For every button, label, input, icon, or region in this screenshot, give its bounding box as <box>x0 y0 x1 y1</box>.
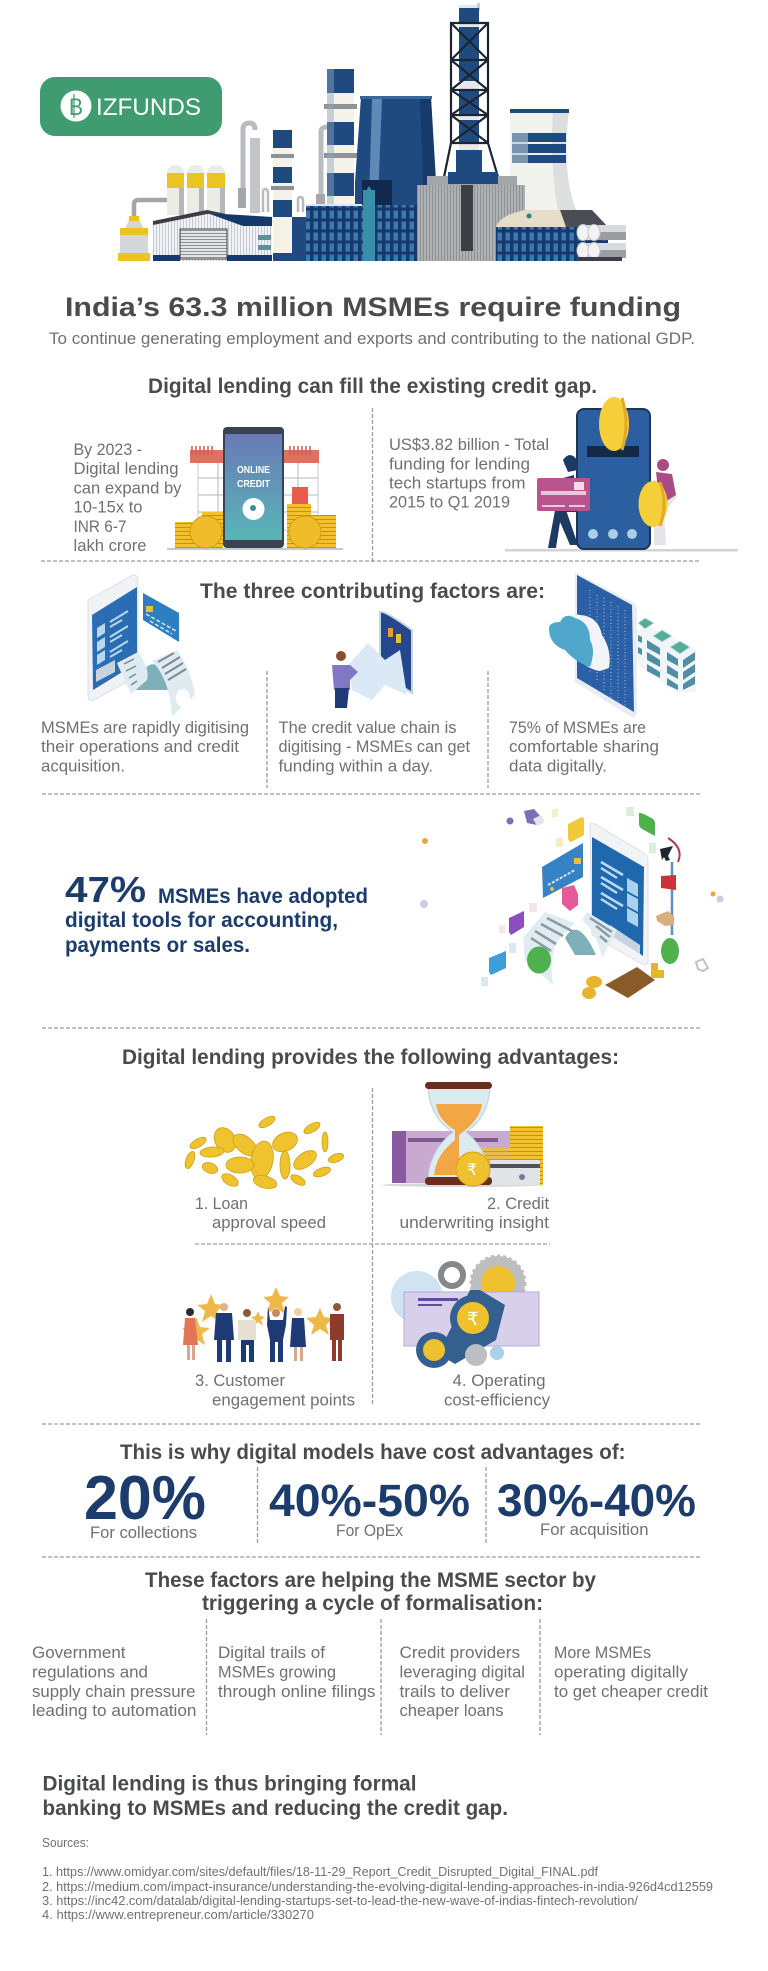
blue office building <box>306 186 417 261</box>
icon: person reading document beside phone <box>332 612 412 708</box>
text: customer engagement: engagement points <box>212 1392 355 1410</box>
icon: scattered gold coins <box>183 1114 345 1191</box>
conclusion: banking to MSMEs and reducing the credit gap. <box>42 1797 508 1820</box>
icon: tablet with cloud and servers <box>549 572 696 718</box>
text: 75 percent <box>509 719 659 776</box>
text: by 2023: lakh crore <box>74 537 146 555</box>
blue cooling tower <box>355 96 436 210</box>
sources: 4. https://www.entrepreneur.com/article/330270 <box>42 1908 314 1922</box>
icon: phone with receipt <box>88 575 195 716</box>
text: credit underwriting insight: 2. Credit <box>487 1195 549 1213</box>
icon: gears with money: ₹ <box>467 1309 478 1330</box>
callout: 47 percent: payments or sales. <box>65 934 250 957</box>
conclusion <box>42 1772 508 1820</box>
subtitle: To continue generating employment and exports and contributing to the national GDP. <box>49 330 695 348</box>
text: credit value chain: The credit value chain is <box>278 719 456 737</box>
title: India’s 63.3 million MSMEs require funding <box>65 292 681 322</box>
text: US$3.82 billion: 2015 to Q1 2019 <box>389 494 510 512</box>
text: credit value chain: funding within a day. <box>278 758 433 776</box>
text: digital trails: through online filings <box>218 1683 376 1701</box>
steel cylinders <box>577 224 626 261</box>
callout: 47 percent: 47% <box>65 869 146 910</box>
text: credit providers: cheaper loans <box>400 1702 504 1720</box>
heading: advantages: Digital lending provides the following advantages: <box>122 1046 619 1069</box>
heading: cycle of formalisation: These factors are helping the MSME sector by <box>145 1569 596 1592</box>
text: 75 percent: comfortable sharing <box>509 738 659 756</box>
icon: online credit phone with calendar and coins <box>167 427 343 550</box>
text: by 2023: 10-15x to <box>74 498 142 516</box>
text: credit underwriting insight <box>400 1195 549 1232</box>
text: credit value chain: digitising - MSMEs can get <box>278 738 470 756</box>
warehouse <box>153 210 306 261</box>
text: loan approval speed <box>195 1195 326 1232</box>
icon: hourglass with money and coins: ₹ <box>467 1160 477 1179</box>
text: credit providers: Credit providers <box>400 1644 520 1662</box>
heading: cost advantages: This is why digital models have cost advantages of: <box>120 1441 626 1464</box>
icon: people with stars <box>182 1287 344 1362</box>
panel: factor 1 digitising operations <box>41 575 249 776</box>
heading: three factors: The three contributing factors are: <box>200 580 545 603</box>
pipes <box>134 123 327 218</box>
logo: Bizfunds <box>40 77 222 136</box>
text: 75 percent: 75% of MSMEs are <box>509 719 646 737</box>
text: by 2023: By 2023 - <box>74 441 142 459</box>
text: US$3.82 billion <box>389 436 549 512</box>
text: digital trails: Digital trails of <box>218 1644 325 1662</box>
text: US$3.82 billion: funding for lending <box>389 456 530 474</box>
icon: hourglass with money and coins <box>382 1082 543 1187</box>
callout: 47 percent: MSMEs have adopted <box>158 885 368 908</box>
text: government regulations: leading to automation <box>32 1702 196 1720</box>
text: government regulations: Government <box>32 1644 126 1662</box>
text: by 2023: Digital lending <box>74 460 178 478</box>
text: digital trails <box>218 1644 376 1701</box>
panel: factor 3 sharing data <box>509 572 696 776</box>
panel: digital lending expansion <box>74 427 343 555</box>
panel: lending startup funding <box>389 397 738 552</box>
text: rapidly digitising: MSMEs are rapidly digitising <box>41 719 249 737</box>
sources <box>42 1836 713 1922</box>
heading: cycle of formalisation: triggering a cycle of formalisation: <box>202 1592 543 1615</box>
stat: opex: For OpEx <box>336 1522 404 1540</box>
panel: advantage 4 <box>391 1256 551 1410</box>
factory illustration <box>118 3 626 261</box>
three yellow tanks <box>167 165 225 215</box>
text: operating cost efficiency <box>444 1372 551 1410</box>
text: operating cost efficiency: cost-efficiency <box>444 1392 551 1410</box>
text: by 2023: INR 6-7 <box>74 518 126 536</box>
stat: opex: 40%-50% <box>269 1475 470 1526</box>
icon: online credit phone with calendar and coins: CREDIT <box>237 479 270 490</box>
text: rapidly digitising: acquisition. <box>41 758 125 776</box>
text: 75 percent: data digitally. <box>509 758 607 776</box>
callout: 47 percent: digital tools for accounting, <box>65 909 338 932</box>
text: loan approval speed: approval speed <box>212 1214 326 1232</box>
stat: acquisition: 30%-40% <box>497 1475 696 1526</box>
sources: 1. https://www.omidyar.com/sites/default/files/18-11-29_Report_Credit_Disrupted_Digital_FINAL.pdf <box>42 1865 599 1879</box>
text: government regulations <box>32 1644 196 1720</box>
text: government regulations: regulations and <box>32 1664 148 1682</box>
small chimney <box>271 130 294 261</box>
stat: acquisition: For acquisition <box>540 1521 648 1539</box>
text: US$3.82 billion: tech startups from <box>389 474 526 492</box>
text: by 2023: can expand by <box>74 480 182 498</box>
text: more MSMEs <box>554 1644 708 1701</box>
conclusion: Digital lending is thus bringing formal <box>42 1772 416 1796</box>
striped chimney <box>324 69 357 204</box>
icon: online credit phone with calendar and coins: ONLINE <box>237 465 270 476</box>
heading: cycle of formalisation <box>145 1569 596 1615</box>
grey building <box>417 172 525 261</box>
text: more MSMEs: operating digitally <box>554 1664 689 1682</box>
sources: 2. https://medium.com/impact-insurance/understanding-the-evolving-digital-lending-approaches-in-india-926d4cd12559 <box>42 1880 713 1894</box>
text: credit providers: leveraging digital <box>400 1664 525 1682</box>
text: more MSMEs: to get cheaper credit <box>554 1683 708 1701</box>
text: rapidly digitising: their operations and credit <box>41 738 239 756</box>
panel: advantage 2 <box>382 1082 549 1232</box>
text: credit value chain <box>278 719 470 776</box>
text: US$3.82 billion: US$3.82 billion - Total <box>389 436 549 454</box>
panel: advantage 3 <box>182 1287 355 1410</box>
text: loan approval speed: 1. Loan <box>195 1195 248 1213</box>
text: by 2023 <box>74 441 182 555</box>
sources: Sources: <box>42 1836 89 1850</box>
text: credit underwriting insight: underwriting insight <box>400 1214 549 1232</box>
lattice tower with chimney <box>444 3 498 178</box>
text: credit providers: trails to deliver <box>400 1683 511 1701</box>
icon: gears with money <box>391 1256 539 1368</box>
text: customer engagement <box>195 1372 355 1410</box>
logo: Bizfunds: B <box>69 94 83 121</box>
text: credit providers <box>400 1644 525 1720</box>
stat: collections: For collections <box>90 1524 197 1542</box>
text: government regulations: supply chain pressure <box>32 1683 196 1701</box>
domed hall <box>496 210 608 261</box>
text: customer engagement: 3. Customer <box>195 1372 285 1390</box>
icon: phone with receipt, apps and wallet <box>420 807 724 999</box>
heading: credit gap: Digital lending can fill the existing credit gap. <box>148 375 597 398</box>
text: operating cost efficiency: 4. Operating <box>452 1372 546 1390</box>
text: digital trails: MSMEs growing <box>218 1664 336 1682</box>
callout: 47 percent <box>65 869 368 957</box>
white cooling tower <box>510 109 576 210</box>
icon: phone with coins, man and woman <box>505 397 738 552</box>
logo: Bizfunds: IZFUNDS <box>96 94 201 121</box>
sources: 3. https://inc42.com/datalab/digital-lending-startups-set-to-lead-the-new-wave-of-indias-fintech-revolution/ <box>42 1894 639 1908</box>
panel: advantage 1 <box>183 1114 345 1232</box>
text: more MSMEs: More MSMEs <box>554 1644 651 1662</box>
panel: factor 2 credit value chain <box>278 612 470 776</box>
stat: collections: 20% <box>84 1464 206 1533</box>
text: rapidly digitising <box>41 719 249 776</box>
small yellow tank <box>118 216 150 261</box>
